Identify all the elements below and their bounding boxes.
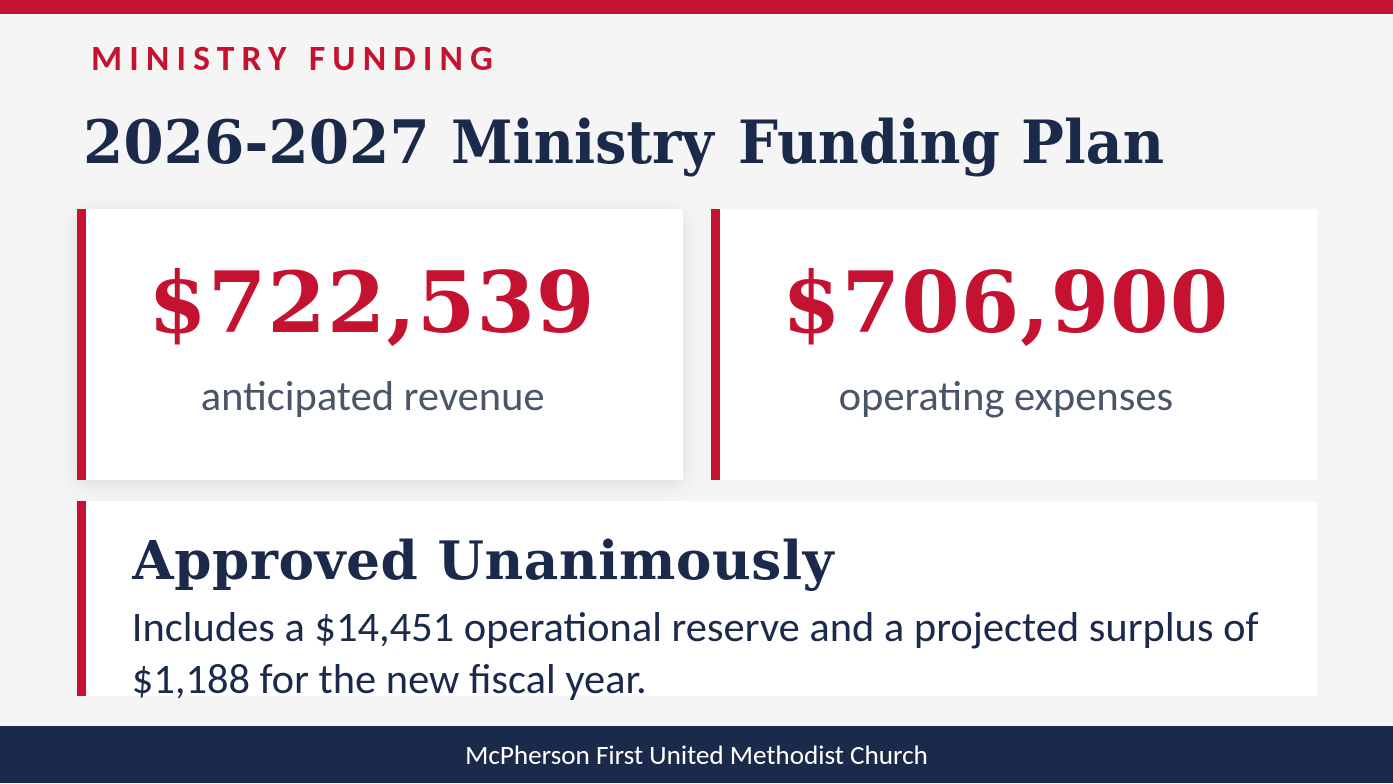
panel: operating expenses xyxy=(711,209,1317,480)
title: Plan xyxy=(1021,108,1164,178)
revenue caption: anticipated revenue xyxy=(201,371,545,422)
panel: anticipated revenue xyxy=(77,209,683,480)
panel body text: Includes a $14,451 operational reserve and a projected surplus of xyxy=(132,602,1258,653)
footer bar xyxy=(0,726,1393,783)
panel heading: Approved Unanimously xyxy=(132,529,834,592)
expenses amount: $706,900 xyxy=(782,253,1229,352)
footer bar: McPherson First United Methodist Church xyxy=(465,739,928,772)
eyebrow label: MINISTRY FUNDING xyxy=(91,36,500,80)
panel body text xyxy=(132,602,1258,705)
panel body text: $1,188 for the new fiscal year. xyxy=(132,654,647,705)
title: 2026-2027 xyxy=(83,108,430,178)
title: Funding xyxy=(738,108,1000,178)
accent stripe xyxy=(711,209,720,480)
accent stripe xyxy=(77,209,86,480)
revenue amount: $722,539 xyxy=(148,253,595,352)
accent stripe xyxy=(77,501,86,696)
title: Ministry xyxy=(451,108,714,178)
top accent bar xyxy=(0,0,1393,14)
expenses caption: operating expenses xyxy=(839,371,1173,422)
panel: approved unanimously xyxy=(77,501,1317,696)
title xyxy=(83,108,1164,178)
